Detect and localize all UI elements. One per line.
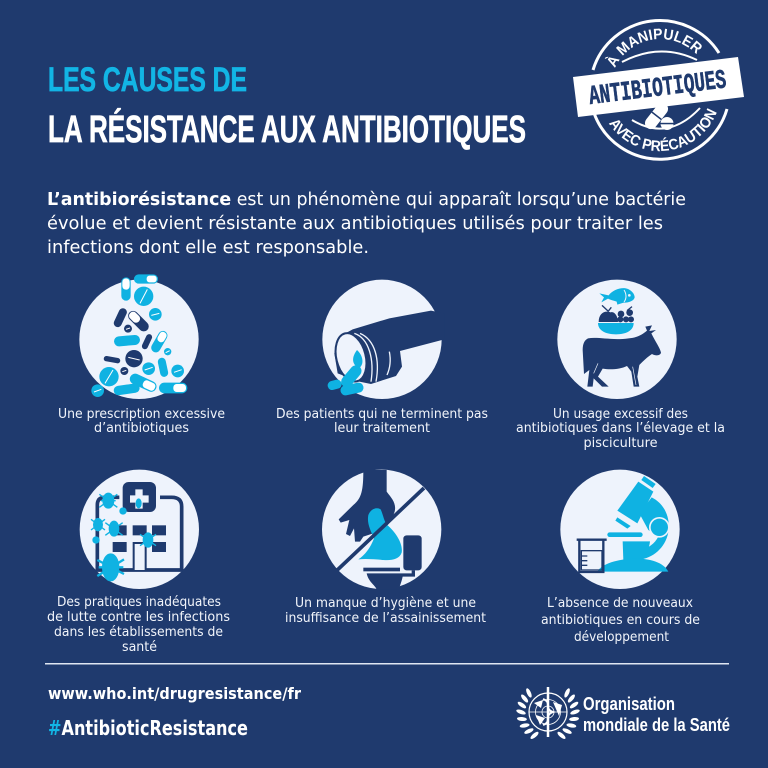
intro paragraph: L’antibiorésistance est un phénomène qui apparaît lorsqu’une bactérie: [47, 189, 686, 210]
panel: nouveaux antibiotiques: [541, 470, 700, 645]
stamp: antibiotiques à manipuler avec précaution: À MANIPULER: [604, 28, 702, 68]
caption: Des patients qui ne terminent pas: [276, 407, 488, 422]
panel: hygiène et assainissement: [285, 470, 486, 626]
intro paragraph: [47, 189, 686, 258]
icon: hospital with bacteria: [80, 470, 199, 589]
organisation name: [583, 694, 730, 735]
caption: insuffisance de l’assainissement: [285, 611, 486, 626]
panel: établissements de santé: [47, 470, 230, 655]
caption: Des pratiques inadéquates: [57, 595, 221, 610]
icon: fish, fruit bowl and cow: [557, 280, 677, 399]
caption: [276, 407, 488, 436]
stamp: antibiotiques à manipuler avec précaution: [573, 19, 744, 161]
caption: d’antibiotiques: [94, 421, 189, 436]
hashtag: #AntibioticResistance: [48, 716, 248, 740]
caption: antibiotiques dans l’élevage et la: [516, 421, 725, 436]
icon: tipped pill bottle: [322, 280, 444, 399]
title: [48, 61, 526, 151]
panel: élevage et pisciculture: [516, 280, 725, 451]
title: LES CAUSES DE: [48, 61, 247, 99]
caption: leur traitement: [334, 421, 430, 436]
caption: Un usage excessif des: [553, 407, 688, 422]
icon: microscope and beaker: [560, 470, 680, 589]
stamp: antibiotiques à manipuler avec précaution: AVEC PRÉCAUTION: [608, 108, 717, 152]
caption: de lutte contre les infections: [47, 610, 230, 625]
intro paragraph: évolue et devient résistante aux antibiotiques utilisés pour traiter les: [47, 213, 663, 234]
organisation name: mondiale de la Santé: [583, 715, 730, 735]
website url: www.who.int/drugresistance/fr: [48, 684, 301, 703]
caption: [516, 407, 725, 451]
caption: [47, 595, 230, 655]
icon: crossed-out hand and toilet: [322, 470, 441, 589]
organisation name: Organisation: [583, 694, 675, 714]
caption: [58, 407, 225, 436]
caption: pisciculture: [584, 436, 658, 451]
title: LA RÉSISTANCE AUX ANTIBIOTIQUES: [48, 107, 526, 151]
caption: [285, 596, 486, 626]
caption: L’absence de nouveaux: [547, 596, 693, 611]
panel: traitement non terminé: [276, 280, 488, 436]
caption: [541, 596, 700, 645]
caption: développement: [574, 630, 669, 645]
icon: pills: [79, 274, 199, 399]
caption: antibiotiques en cours de: [541, 613, 700, 628]
panel: prescription excessive: [58, 274, 225, 436]
caption: Un manque d’hygiène et une: [295, 596, 476, 611]
intro paragraph: infections dont elle est responsable.: [47, 237, 369, 258]
caption: Une prescription excessive: [58, 407, 225, 422]
caption: santé: [122, 640, 157, 655]
logo: World Health Organization emblem and name: [516, 687, 730, 740]
caption: dans les établissements de: [54, 625, 223, 640]
icon: WHO emblem: [516, 687, 580, 740]
